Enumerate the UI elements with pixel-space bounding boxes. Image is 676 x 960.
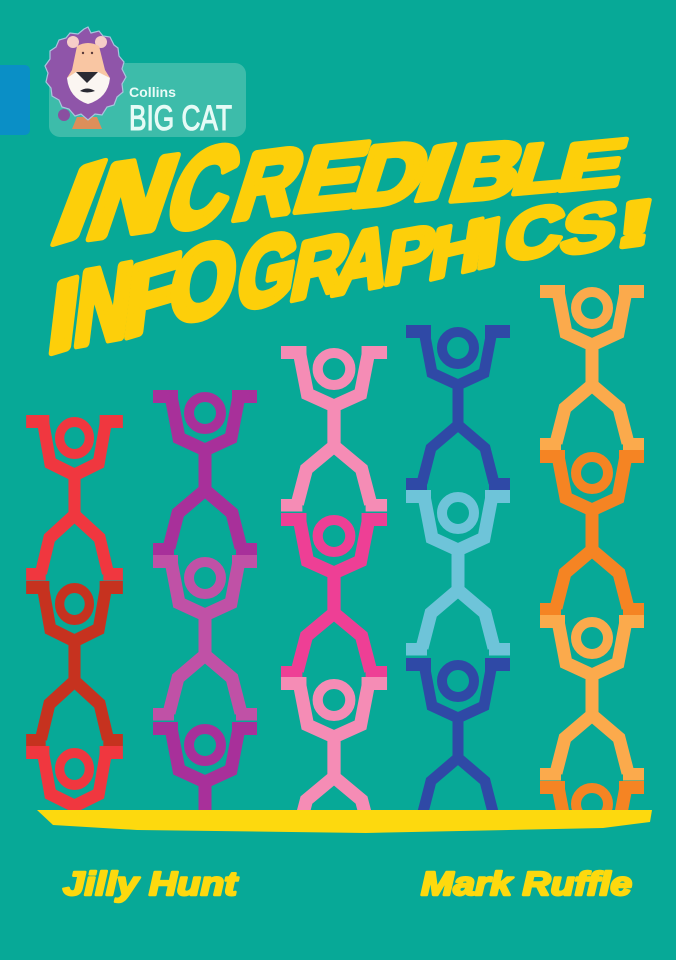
title line: INCREDIBLE: I: [405, 127, 466, 218]
title line: INFOGRAPHICS!: I: [43, 255, 85, 375]
logo text: BIG CAT: BIG CAT: [129, 99, 232, 138]
stack: pink figures: [281, 346, 387, 842]
logo panel: [49, 63, 246, 137]
title line: INCREDIBLE: [38, 119, 635, 268]
figure stacks: [26, 285, 644, 833]
icon: lion mascot: [45, 27, 126, 129]
title line: INCREDIBLE: B: [441, 123, 535, 218]
stack: purple figures: [153, 390, 257, 810]
title line: INFOGRAPHICS!: H: [425, 203, 489, 296]
stack: orange figures: [540, 285, 644, 810]
title line: INFOGRAPHICS!: N: [69, 240, 138, 369]
title line: INCREDIBLE: N: [75, 133, 191, 262]
title line: INFOGRAPHICS!: [43, 185, 660, 375]
title line: INFOGRAPHICS!: C: [500, 188, 569, 279]
title line: INCREDIBLE: E: [284, 123, 379, 232]
yellow floor line: [37, 810, 652, 833]
title line: INFOGRAPHICS!: A: [327, 208, 399, 314]
title line: INCREDIBLE: R: [222, 127, 316, 241]
title line: INFOGRAPHICS!: P: [379, 208, 441, 301]
title line: INFOGRAPHICS!: S: [556, 186, 622, 271]
author: Jilly Hunt: Jilly Hunt: [63, 865, 239, 902]
title line: INFOGRAPHICS!: O: [164, 218, 243, 347]
title line: INFOGRAPHICS!: !: [611, 185, 660, 262]
title line: INCREDIBLE: E: [551, 124, 635, 205]
title line: INCREDIBLE: D: [343, 123, 441, 226]
title line: INCREDIBLE: C: [154, 119, 253, 256]
title line: INFOGRAPHICS!: F: [119, 233, 185, 360]
stack: blue figures: [406, 325, 510, 824]
logo text: Collins: Collins: [129, 84, 176, 100]
title line: INFOGRAPHICS!: R: [284, 215, 357, 319]
title line: INFOGRAPHICS!: G: [230, 209, 305, 332]
logo: Collins Big Cat: [45, 27, 246, 138]
title line: INCREDIBLE: L: [504, 127, 578, 209]
stack: red figures: [26, 415, 123, 810]
author: Mark Ruffle: Mark Ruffle: [421, 865, 632, 902]
colour band tab: [0, 65, 30, 135]
title: [38, 119, 660, 375]
title line: INCREDIBLE: I: [38, 136, 120, 268]
title line: INFOGRAPHICS!: I: [473, 203, 504, 283]
